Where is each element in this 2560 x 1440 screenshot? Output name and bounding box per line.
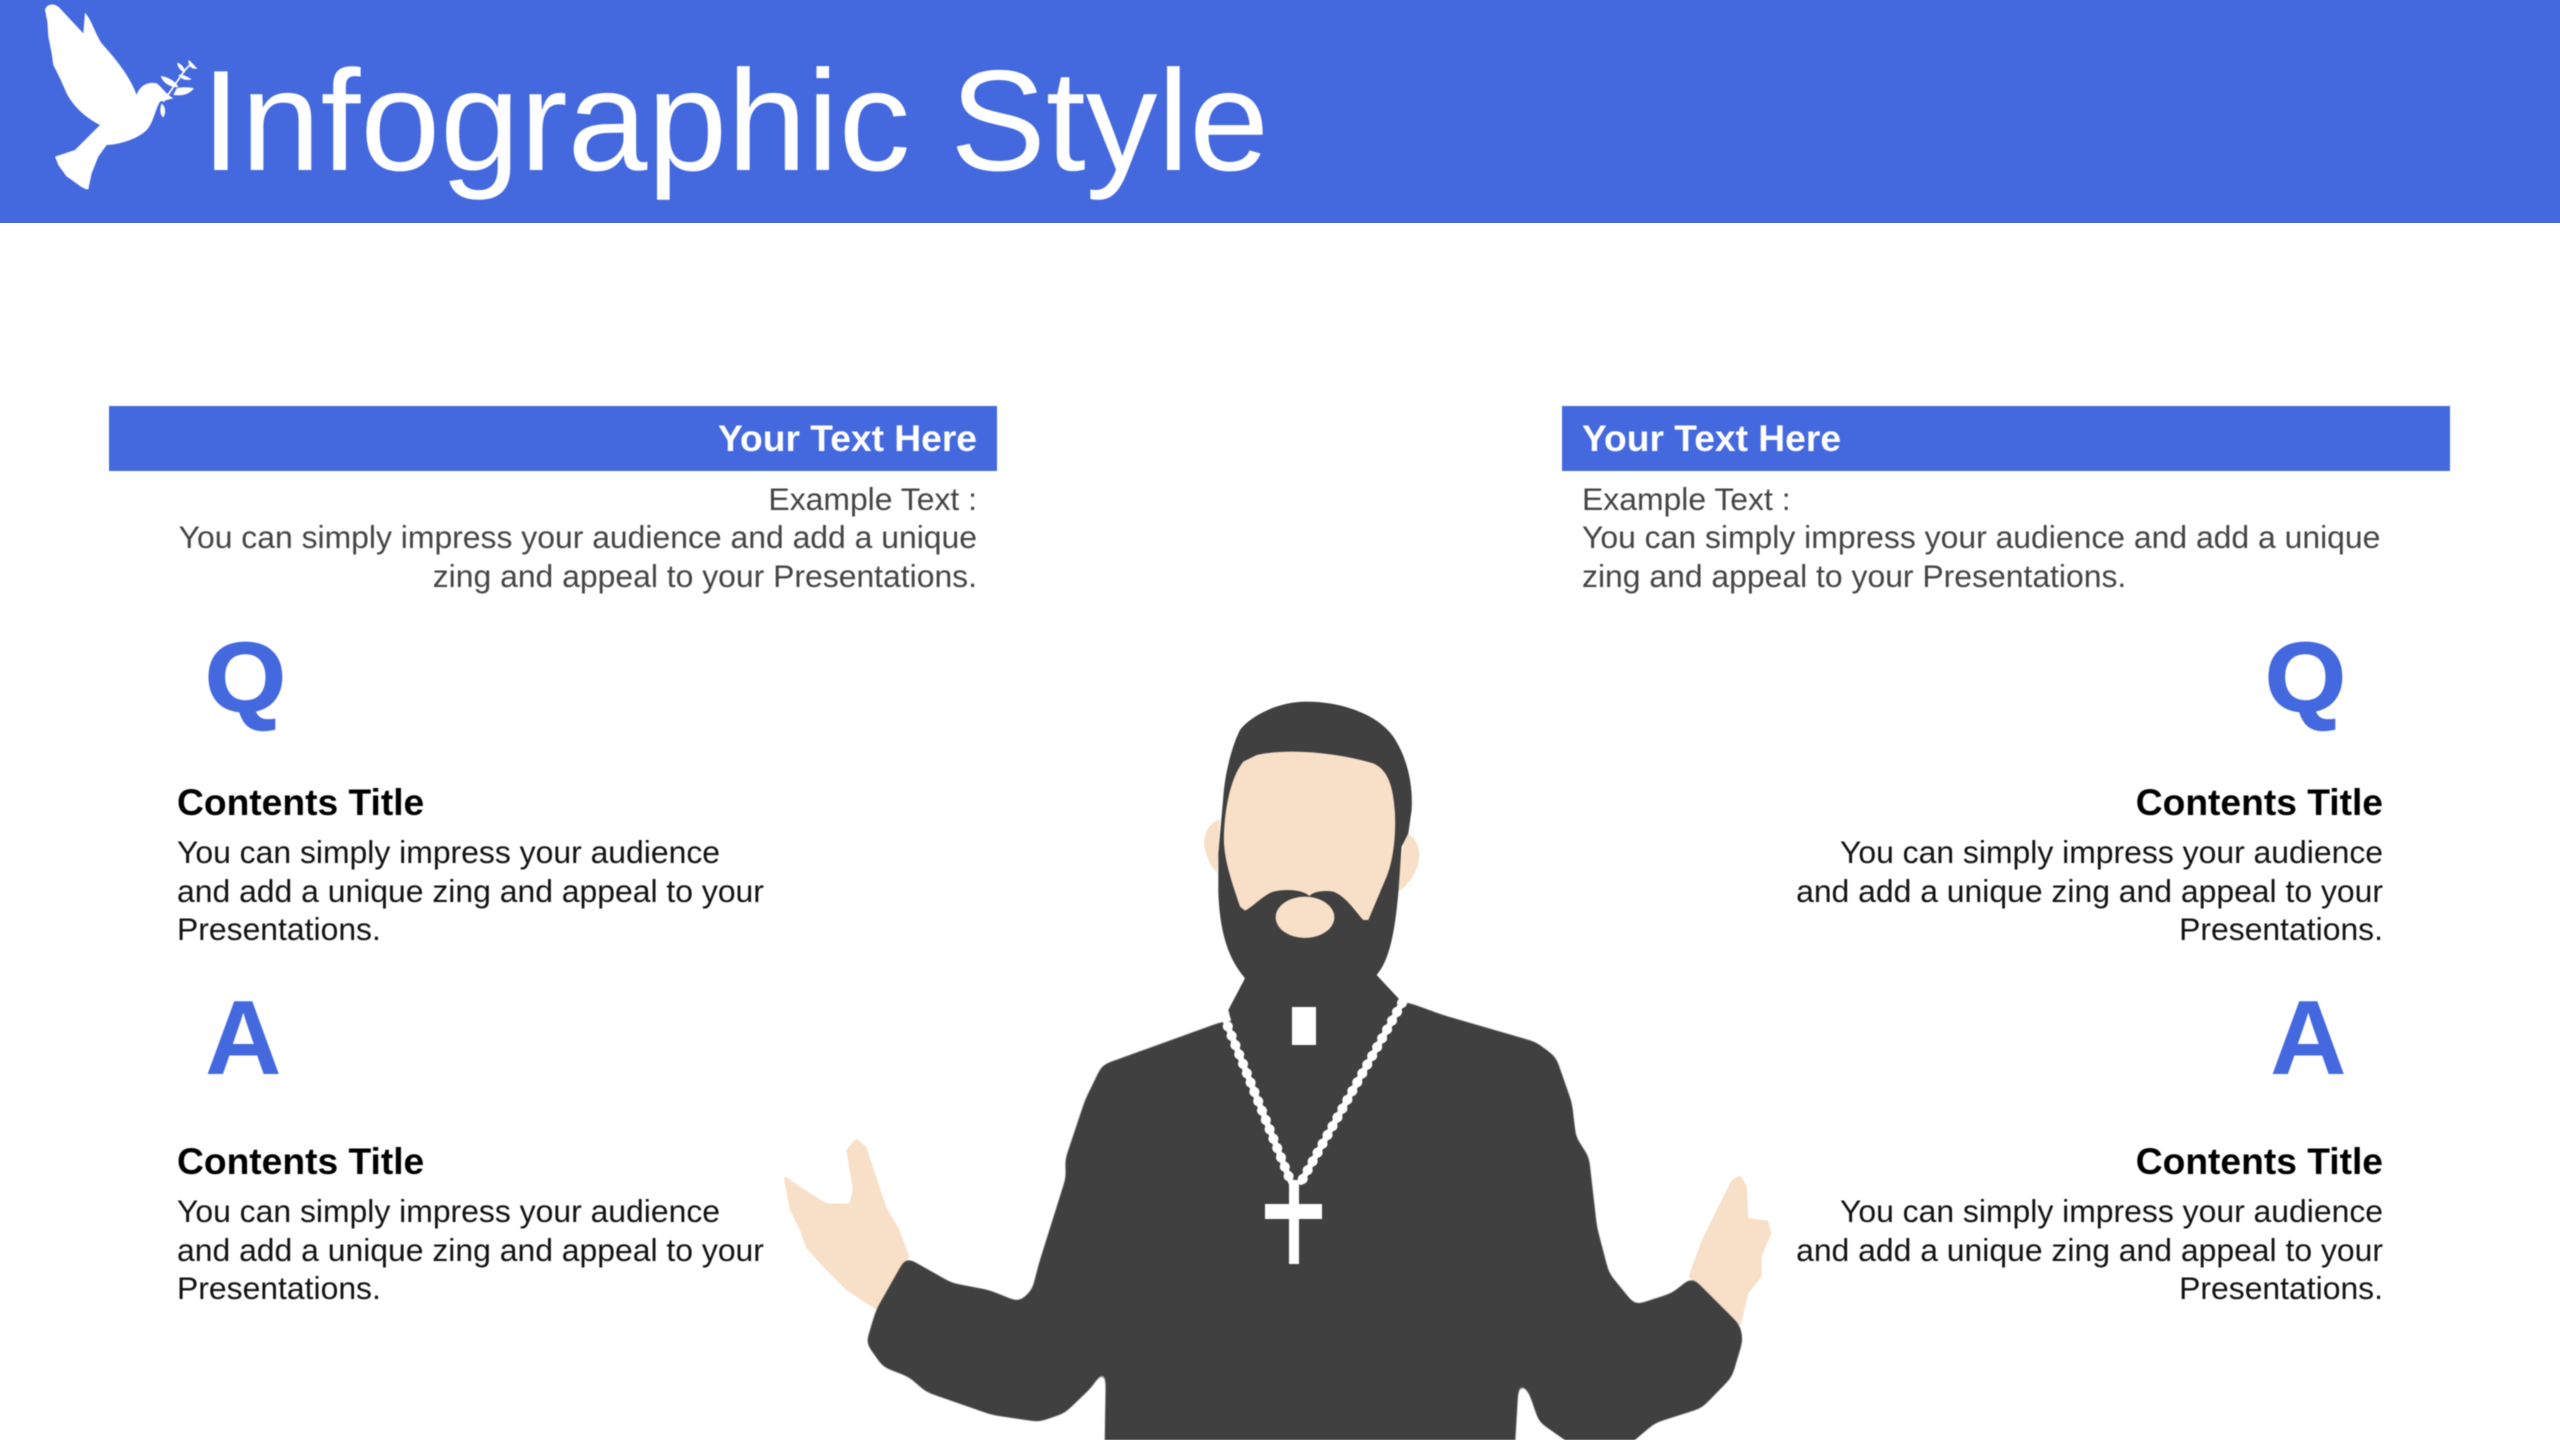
- left question block: and add a unique zing and appeal to your: [177, 873, 764, 909]
- right heading bar: Your Text Here: [1582, 417, 1841, 459]
- left question block: Contents Title: [177, 781, 424, 823]
- left intro text: zing and appeal to your Presentations.: [433, 558, 977, 594]
- left question block: [177, 781, 764, 947]
- ears: [1204, 819, 1419, 893]
- panel: left intro: [109, 406, 997, 594]
- right hand: [1689, 1175, 1772, 1327]
- left answer block: Contents Title: [177, 1140, 424, 1182]
- right answer block: Presentations.: [2179, 1270, 2383, 1306]
- cross pendant: [1265, 1180, 1322, 1264]
- right A letter: A: [2270, 979, 2347, 1097]
- left Q letter: Q: [205, 624, 286, 732]
- right intro text: You can simply impress your audience and add a unique: [1582, 519, 2380, 555]
- right question block: You can simply impress your audience: [1840, 834, 2383, 870]
- left question block: Presentations.: [177, 911, 381, 947]
- mouth: [1276, 897, 1334, 938]
- right answer block: You can simply impress your audience: [1840, 1193, 2383, 1229]
- left heading bar: [109, 406, 997, 471]
- right answer block: Contents Title: [2136, 1140, 2383, 1182]
- left answer block: Presentations.: [177, 1270, 381, 1306]
- left hand: [783, 1138, 909, 1312]
- header band: [0, 0, 2560, 223]
- right Q letter: Q: [2265, 624, 2346, 732]
- left intro text: You can simply impress your audience and add a unique: [179, 519, 977, 555]
- clerical collar: [1292, 1007, 1316, 1045]
- left answer block: [177, 1140, 764, 1306]
- rosary necklace: [1224, 1003, 1402, 1182]
- right heading bar: [1562, 406, 2450, 471]
- left question block: You can simply impress your audience: [177, 834, 720, 870]
- right answer block: [1796, 1140, 2383, 1306]
- icon: dove with olive branch: [45, 4, 197, 189]
- hair, beard and neck: [1218, 702, 1427, 1080]
- left answer block: You can simply impress your audience: [177, 1193, 720, 1229]
- right question block: Contents Title: [2136, 781, 2383, 823]
- right intro text: Example Text :: [1582, 481, 1791, 517]
- panel: right intro: [1562, 406, 2450, 594]
- robe: [866, 1002, 1743, 1440]
- left intro text: Example Text :: [768, 481, 977, 517]
- right intro text: zing and appeal to your Presentations.: [1582, 558, 2126, 594]
- right question block: and add a unique zing and appeal to your: [1796, 873, 2383, 909]
- head: [1204, 702, 1427, 1080]
- illustration: priest: [783, 702, 1772, 1440]
- left answer block: and add a unique zing and appeal to your: [177, 1232, 764, 1268]
- left heading bar: Your Text Here: [718, 417, 977, 459]
- left A letter: A: [205, 979, 282, 1097]
- right question block: [1796, 781, 2383, 947]
- face: [1224, 752, 1395, 920]
- right answer block: and add a unique zing and appeal to your: [1796, 1232, 2383, 1268]
- right question block: Presentations.: [2179, 911, 2383, 947]
- title: Infographic Style: [201, 41, 1269, 201]
